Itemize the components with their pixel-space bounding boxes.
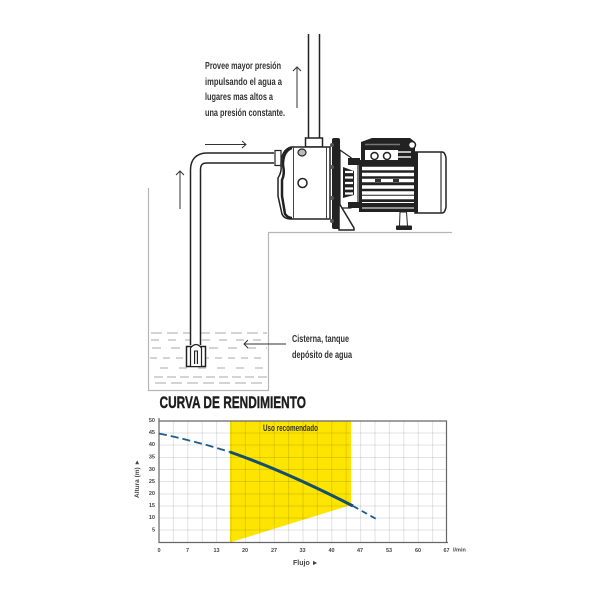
cistern label: depósito de agua	[292, 349, 352, 361]
pump volute body	[278, 147, 330, 219]
arrow: to cistern	[244, 340, 286, 348]
performance chart	[134, 418, 466, 567]
y axis labels: 30	[149, 467, 155, 473]
x axis unit: l/min	[453, 548, 466, 554]
x axis labels: 7	[186, 548, 189, 554]
x axis labels: 27	[271, 548, 277, 554]
fins neck	[343, 167, 354, 198]
water level dashes	[150, 333, 267, 383]
y axis labels: 35	[149, 454, 155, 460]
bracket	[340, 150, 358, 208]
x axis labels: 53	[386, 548, 392, 554]
outlet pipe	[306, 34, 322, 147]
foot valve	[186, 344, 206, 366]
x axis labels: 20	[242, 548, 248, 554]
cistern label	[292, 333, 352, 361]
y axis labels: 45	[149, 430, 155, 436]
dashed curve right	[353, 506, 378, 520]
y axis labels: 5	[152, 528, 155, 534]
motor fan cover	[415, 152, 446, 213]
x axis labels: 13	[213, 548, 220, 554]
chart frame	[159, 418, 448, 542]
description text: pressure: una presión constante.	[205, 107, 285, 119]
description text: pressure: impulsando el agua a	[205, 76, 282, 88]
pump	[275, 138, 446, 230]
x axis labels: 60	[415, 548, 421, 554]
motor foot	[396, 212, 412, 230]
flange	[330, 138, 340, 229]
y axis labels: 15	[149, 503, 155, 509]
chart title: CURVA DE RENDIMIENTO	[160, 393, 306, 412]
y axis labels: 20	[149, 491, 155, 497]
y axis labels: 25	[149, 479, 155, 485]
arrow: suction upward	[176, 171, 184, 209]
chart grid	[159, 421, 447, 542]
x axis title: Flujo ►	[293, 560, 319, 567]
y axis labels: 40	[149, 442, 155, 448]
dashed curve left	[159, 434, 230, 452]
x axis labels: 0	[157, 548, 161, 554]
arrow: upward pressure	[293, 67, 301, 108]
recommended label: Uso recomendado	[263, 423, 318, 433]
suction pipe interior	[196, 158, 274, 345]
cistern label: Cisterna, tanque	[292, 333, 349, 345]
x axis labels	[157, 548, 450, 554]
motor body	[348, 158, 415, 212]
y axis title: Altura (m) ►	[134, 459, 141, 498]
suction pipe	[196, 158, 274, 345]
description text: pressure	[205, 60, 285, 119]
y axis labels	[149, 418, 155, 534]
arrow: horizontal flow	[205, 141, 246, 148]
y axis labels: 50	[149, 418, 155, 424]
description text: pressure: lugares mas altos a	[205, 91, 273, 103]
x axis labels: 67	[443, 548, 450, 554]
pipe connector	[275, 150, 281, 166]
support foot	[339, 203, 354, 230]
description text: pressure: Provee mayor presión	[205, 60, 281, 72]
y axis labels: 10	[149, 515, 155, 521]
solid curve: recommended	[230, 452, 353, 506]
terminal box	[361, 138, 416, 161]
x axis labels: 40	[328, 548, 335, 554]
x axis labels: 33	[299, 548, 306, 554]
recommended use area	[230, 421, 351, 542]
cistern tank and floor line	[148, 188, 452, 390]
x axis labels: 47	[357, 548, 363, 554]
